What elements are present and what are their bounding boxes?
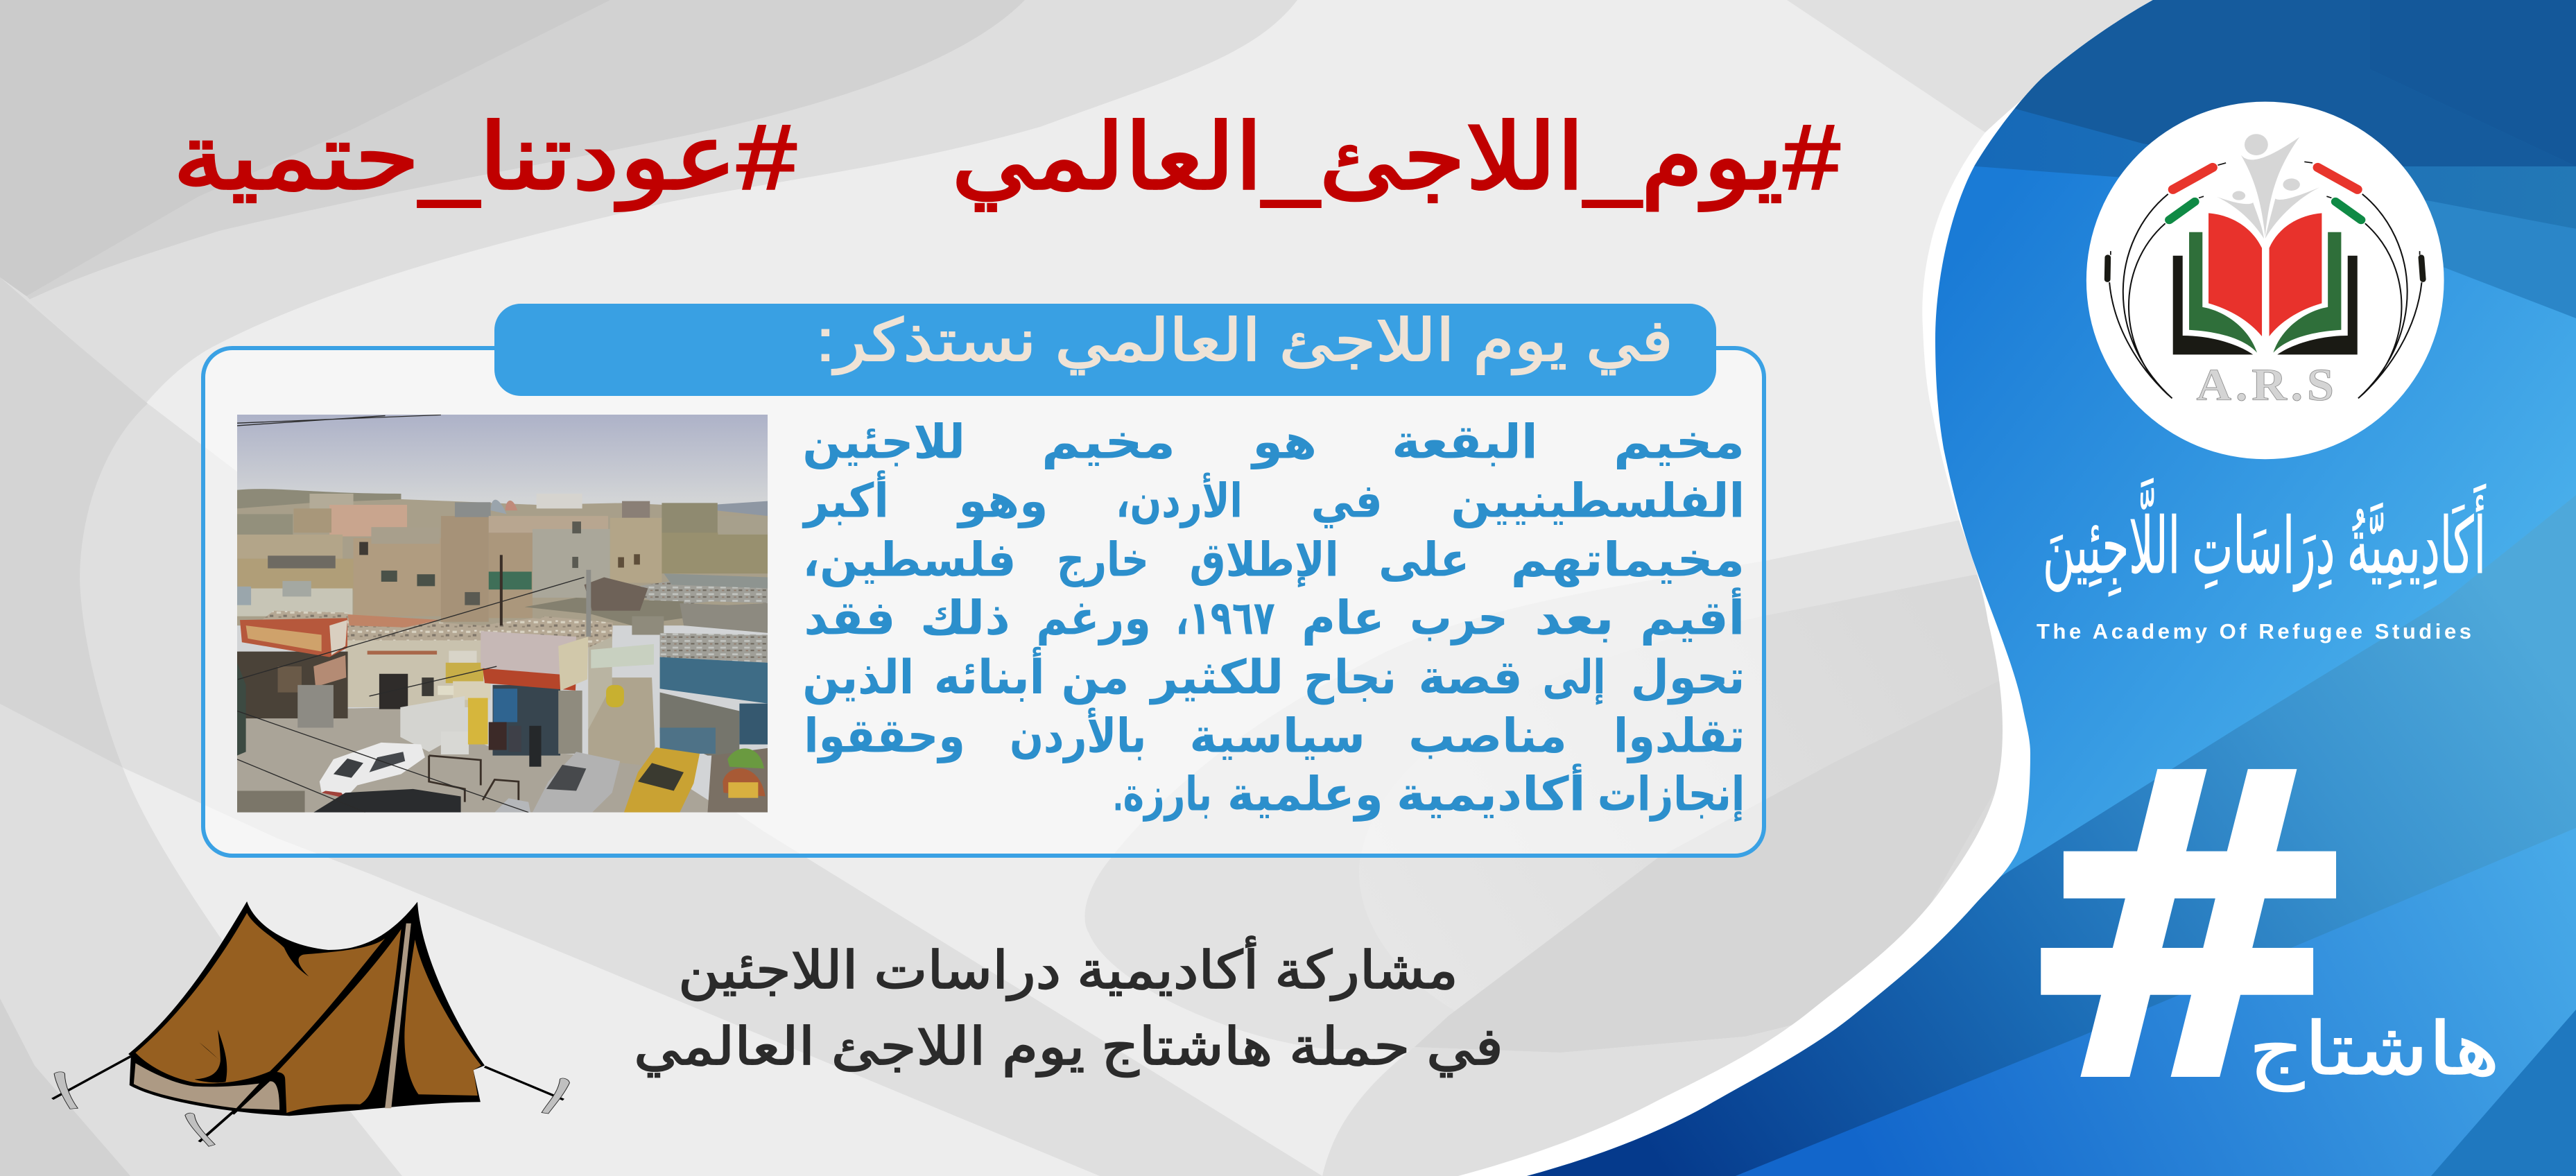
body paragraph about Baqa'a camp: من (1062, 651, 1129, 705)
body paragraph about Baqa'a camp: فقد (804, 591, 895, 644)
bottom caption line two: في حملة هاشتاج يوم اللاجئ العالمي (634, 1017, 1503, 1078)
white curved band (1458, 76, 2080, 1176)
heading pill (494, 304, 1716, 396)
body paragraph about Baqa'a camp: ١٩٦٧، (1175, 591, 1275, 644)
text: إنجازات (1598, 768, 1745, 822)
body paragraph about Baqa'a camp: عام (1302, 591, 1385, 646)
title: our return is inevitable hashtag: #عودتنا_حتمية (173, 106, 796, 211)
body paragraph about Baqa'a camp: على (1378, 533, 1469, 586)
body paragraph about Baqa'a camp: أقيم (1640, 587, 1745, 646)
body paragraph about Baqa'a camp: وحققوا (804, 709, 965, 763)
icon: brown tent (53, 901, 569, 1146)
body paragraph about Baqa'a camp: نجاح (1304, 651, 1397, 705)
body paragraph about Baqa'a camp: مناصب (1408, 709, 1567, 762)
body paragraph about Baqa'a camp: الإطلاق (1189, 533, 1339, 588)
body paragraph about Baqa'a camp: ورغم (1036, 591, 1151, 646)
body paragraph about Baqa'a camp: ذلك (920, 591, 1010, 644)
photo: Baqa'a refugee camp street view (237, 415, 768, 813)
body paragraph about Baqa'a camp: أكاديمية (1397, 763, 1586, 820)
academy name in English: The Academy Of Refugee Studies (2037, 619, 2471, 643)
body paragraph about Baqa'a camp: مخيم (1614, 415, 1745, 469)
panel: info card outline (203, 348, 1764, 856)
icon: open book (2173, 213, 2358, 354)
body paragraph about Baqa'a camp: تحول (1631, 651, 1745, 705)
body paragraph about Baqa'a camp: مخيماتهم (1511, 533, 1745, 588)
logo initials A.R.S: A.R.S (2197, 359, 2334, 410)
body paragraph about Baqa'a camp: سياسية (1189, 709, 1365, 762)
body paragraph about Baqa'a camp: بالأردن (1010, 707, 1146, 763)
icon: reeds in red green black (2107, 162, 2423, 398)
icon: three raised figures (2217, 134, 2319, 239)
body paragraph about Baqa'a camp: أكبر (802, 470, 889, 528)
hashtag word: هاشتاج (2249, 1009, 2500, 1092)
body paragraph about Baqa'a camp: تقلدوا (1614, 709, 1745, 763)
body paragraph about Baqa'a camp: للكثير (1148, 651, 1283, 705)
body paragraph about Baqa'a camp: قصة (1419, 651, 1523, 704)
ground is drawn beneath the shop row (237, 707, 727, 813)
body paragraph about Baqa'a camp: البقعة (1392, 415, 1538, 468)
body paragraph about Baqa'a camp: للاجئين (802, 415, 965, 469)
body paragraph about Baqa'a camp: أبنائه (934, 646, 1045, 704)
body paragraph about Baqa'a camp: هو (1250, 415, 1317, 469)
body paragraph about Baqa'a camp: مخيم (1041, 415, 1175, 469)
blue panel background with facets (1456, 0, 2576, 1176)
logo: Academy of Refugee Studies emblem in white circle (2086, 102, 2444, 459)
body paragraph about Baqa'a camp: فلسطين، (802, 533, 1017, 587)
body paragraph about Baqa'a camp: حرب (1410, 591, 1508, 646)
body paragraph about Baqa'a camp: بارزة. (1113, 768, 1212, 822)
large hash symbol: # (2018, 692, 2359, 1164)
body paragraph about Baqa'a camp (802, 415, 1745, 822)
body paragraph about Baqa'a camp: بعد (1535, 591, 1614, 644)
body paragraph about Baqa'a camp: وعلمية (1227, 768, 1383, 822)
title: world refugee day hashtag: #يوم_اللاجئ_العالمي (951, 106, 1840, 211)
bottom caption line one: مشاركة أكاديمية دراسات اللاجئين (678, 936, 1458, 1001)
body paragraph about Baqa'a camp: الذين (802, 651, 914, 705)
body paragraph about Baqa'a camp: الأردن، (1116, 472, 1243, 528)
body paragraph about Baqa'a camp: خارج (1057, 533, 1149, 587)
body paragraph about Baqa'a camp: في (1311, 474, 1383, 528)
body paragraph about Baqa'a camp: الفلسطينيين (1451, 474, 1745, 528)
heading text: في يوم اللاجئ العالمي نستذكر: (816, 308, 1673, 375)
body paragraph about Baqa'a camp: وهو (956, 474, 1048, 529)
body paragraph about Baqa'a camp: إلى (1542, 651, 1605, 705)
